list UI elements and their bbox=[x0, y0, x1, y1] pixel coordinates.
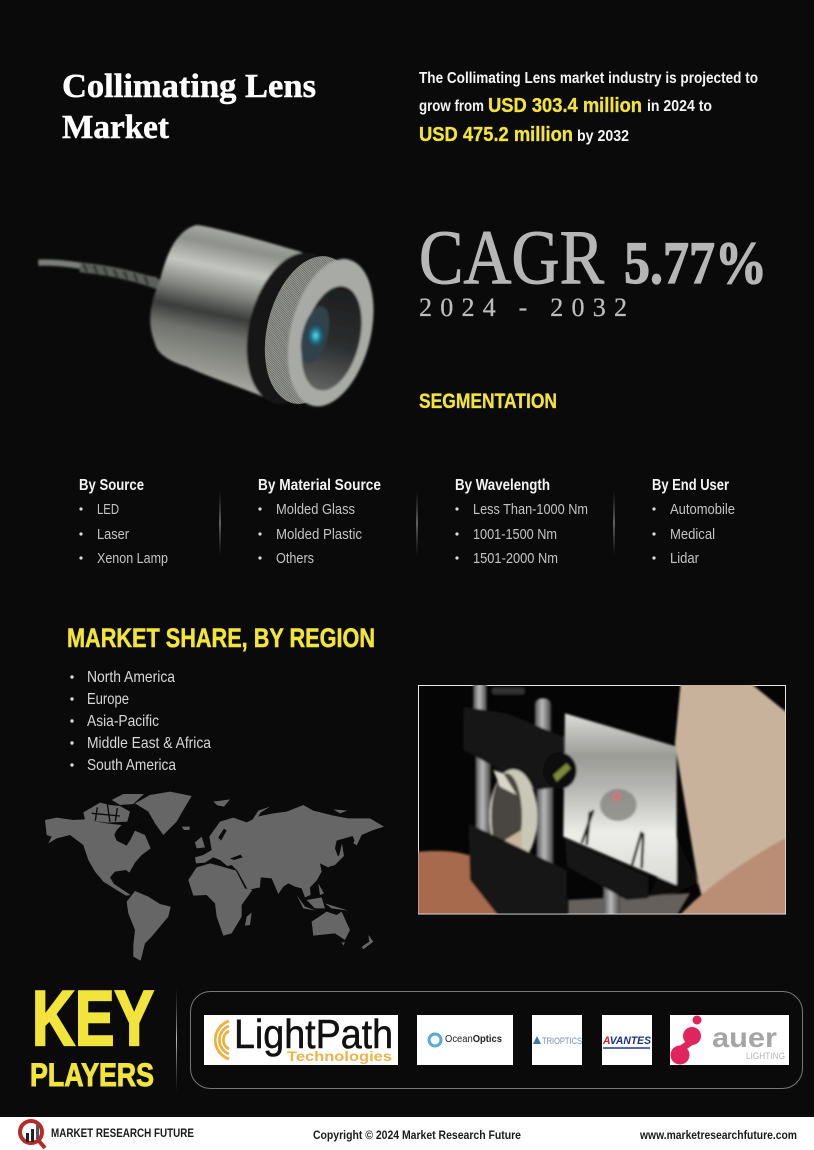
CAGR figure: 5.77% bbox=[624, 230, 767, 296]
market projection text: in 2024 to bbox=[647, 98, 712, 115]
heading: market share by region: MARKET SHARE, BY REGION bbox=[67, 623, 375, 653]
segment: by wavelength: Less Than-1000 Nm bbox=[473, 501, 588, 518]
CAGR figure: 2024 - 2032 bbox=[419, 293, 627, 322]
title: Market bbox=[62, 109, 170, 146]
segment: by source: LED bbox=[97, 501, 119, 518]
footer bar bbox=[0, 1117, 814, 1150]
market projection text: The Collimating Lens market industry is projected to bbox=[419, 70, 758, 87]
region list: North America bbox=[87, 669, 175, 686]
heading: key players bbox=[30, 974, 154, 1093]
panel: key player logos bbox=[190, 992, 802, 1088]
logo: Auer Lighting: LIGHTING bbox=[746, 1051, 785, 1061]
icon: market research future logo bbox=[20, 1121, 45, 1148]
title bbox=[62, 68, 316, 146]
icon: collimating lens product bbox=[38, 225, 388, 415]
footer bar: MARKET RESEARCH FUTURE bbox=[51, 1126, 194, 1140]
heading: key players: PLAYERS bbox=[30, 1057, 154, 1093]
segment: by source: By Source bbox=[79, 477, 144, 494]
segment: by material source: By Material Source bbox=[258, 477, 381, 494]
logo: Avantes: AVANTES bbox=[602, 1035, 652, 1047]
segment: by source: Xenon Lamp bbox=[97, 550, 168, 567]
logo: Auer Lighting: auer bbox=[712, 1022, 777, 1053]
logo: Trioptics bbox=[532, 1015, 582, 1065]
segment: by material source: Others bbox=[276, 550, 314, 567]
segment: by wavelength bbox=[455, 477, 588, 567]
market projection text: grow from bbox=[419, 98, 484, 115]
segment: by material source: Molded Glass bbox=[276, 501, 355, 518]
heading: segmentation: SEGMENTATION bbox=[419, 390, 557, 413]
title: Collimating Lens bbox=[62, 68, 316, 105]
CAGR figure: CAGR bbox=[419, 214, 605, 300]
logo: Ocean Optics: OceanOptics bbox=[445, 1034, 502, 1045]
segment: by end user: Lidar bbox=[670, 550, 699, 567]
segment: by wavelength: 1501-2000 Nm bbox=[473, 550, 558, 567]
logo: LightPath: Technologies bbox=[287, 1048, 392, 1064]
segment: by source bbox=[79, 477, 168, 567]
segment: by material source bbox=[258, 477, 381, 567]
world map bbox=[45, 792, 384, 961]
logo: LightPath bbox=[204, 1011, 398, 1065]
market projection text: by 2032 bbox=[577, 128, 629, 145]
segment: by source: Laser bbox=[97, 526, 129, 543]
logo: Auer Lighting bbox=[670, 1015, 789, 1065]
region list: South America bbox=[87, 757, 176, 774]
heading: key players: KEY bbox=[32, 974, 154, 1062]
region list: Middle East & Africa bbox=[87, 735, 211, 752]
market projection text: USD 475.2 million bbox=[419, 124, 573, 146]
region list: Europe bbox=[87, 691, 129, 708]
region list: Asia-Pacific bbox=[87, 713, 159, 730]
segment: by wavelength: 1001-1500 Nm bbox=[473, 526, 557, 543]
logo: LightPath: LightPath bbox=[234, 1011, 393, 1057]
logo: Avantes bbox=[602, 1015, 652, 1065]
footer bar: Copyright © 2024 Market Research Future bbox=[313, 1128, 521, 1142]
segment: by end user: By End User bbox=[652, 477, 729, 494]
segment: by end user: Medical bbox=[670, 526, 715, 543]
segment: by wavelength: By Wavelength bbox=[455, 477, 550, 494]
segment: by material source: Molded Plastic bbox=[276, 526, 362, 543]
logo: Trioptics: TRIOPTICS bbox=[542, 1036, 582, 1046]
segment: by end user bbox=[652, 477, 735, 567]
photo: lens test setup bbox=[418, 685, 786, 914]
market projection text bbox=[419, 70, 758, 146]
CAGR figure bbox=[419, 214, 767, 322]
logo: Ocean Optics bbox=[417, 1015, 513, 1065]
segment: by end user: Automobile bbox=[670, 501, 735, 518]
market projection text: USD 303.4 million bbox=[488, 95, 642, 117]
region list bbox=[70, 669, 211, 774]
